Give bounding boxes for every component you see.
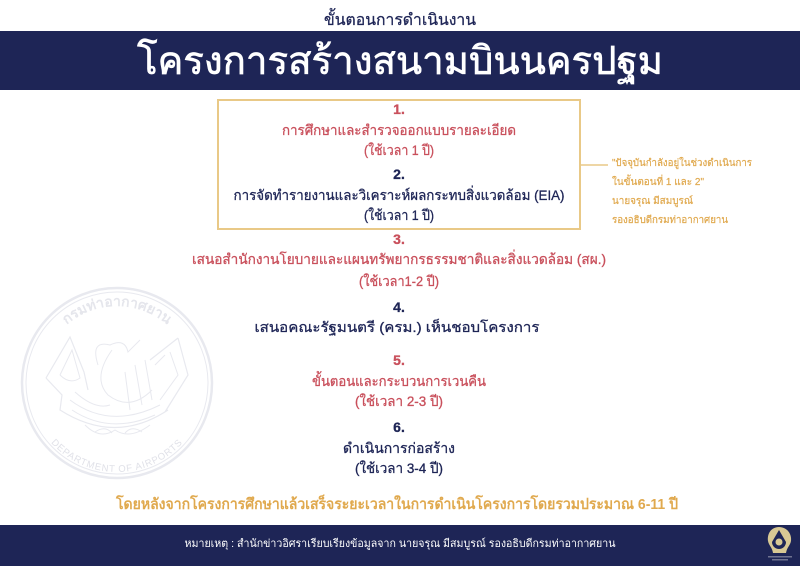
step 4: เสนอคณะรัฐมนตรี (ครม.) เห็นชอบโครงการ [254, 318, 540, 336]
step 4: 4. [393, 299, 405, 315]
quote note: รองอธิบดีกรมท่าอากาศยาน [612, 214, 728, 226]
step 3: 3. [393, 231, 405, 247]
quote note: นายจรุณ มีสมบูรณ์ [612, 195, 693, 207]
step 5: (ใช้เวลา 2-3 ปี) [355, 393, 443, 409]
step 4 [254, 299, 540, 336]
connector line to quote [580, 164, 608, 166]
step 2: การจัดทำรายงานและวิเคราะห์ผลกระทบสิ่งแวดล้อม (EIA) [234, 186, 564, 203]
step 1: การศึกษาและสำรวจออกแบบรายละเอียด [282, 122, 516, 138]
step 1: 1. [393, 101, 405, 117]
title banner: โครงการสร้างสนามบินนครปฐม [137, 39, 663, 84]
step 6: 6. [393, 419, 405, 435]
step 3 [192, 231, 606, 289]
step 1: (ใช้เวลา 1 ปี) [364, 142, 434, 158]
icon: pen nib logo [768, 527, 792, 560]
subtitle: ขั้นตอนการดำเนินงาน [324, 8, 476, 29]
watermark seal: Department of Airports [20, 286, 214, 480]
quote note [612, 157, 753, 226]
step 2: (ใช้เวลา 1 ปี) [364, 207, 434, 223]
step 5: ขั้นตอนและกระบวนการเวนคืน [312, 371, 486, 389]
step 6: ดำเนินการก่อสร้าง [343, 440, 455, 456]
quote note: "ปัจจุบันกำลังอยู่ในช่วงดำเนินการ [612, 157, 753, 169]
step 1 [282, 101, 516, 158]
footer band [0, 525, 800, 566]
watermark seal: Department of Airports: DEPARTMENT OF AIRPORTS [52, 439, 182, 472]
watermark seal: Department of Airports: กรมท่าอากาศยาน [64, 298, 171, 324]
step 3: (ใช้เวลา1-2 ปี) [359, 273, 439, 289]
step 6: (ใช้เวลา 3-4 ปี) [355, 460, 443, 476]
title banner [0, 31, 800, 90]
step 6 [343, 419, 455, 476]
step 2 [234, 166, 564, 223]
summary line: โดยหลังจากโครงการศึกษาแล้วเสร็จระยะเวลาในการดำเนินโครงการโดยรวมประมาณ 6-11 ปี [115, 494, 678, 513]
footer band: หมายเหตุ : สำนักข่าวอิศราเรียบเรียงข้อมูลจาก นายจรุณ มีสมบูรณ์ รองอธิบดีกรมท่าอากาศยาน [184, 537, 616, 550]
step 5: 5. [393, 352, 405, 368]
highlight box around steps 1 and 2 [218, 100, 580, 229]
step 2: 2. [393, 166, 405, 182]
step 5 [312, 352, 486, 409]
quote note: ในขั้นตอนที่ 1 และ 2" [612, 174, 704, 188]
step 3: เสนอสำนักงานโยบายและแผนทรัพยากรธรรมชาติและสิ่งแวดล้อม (สผ.) [192, 250, 606, 267]
